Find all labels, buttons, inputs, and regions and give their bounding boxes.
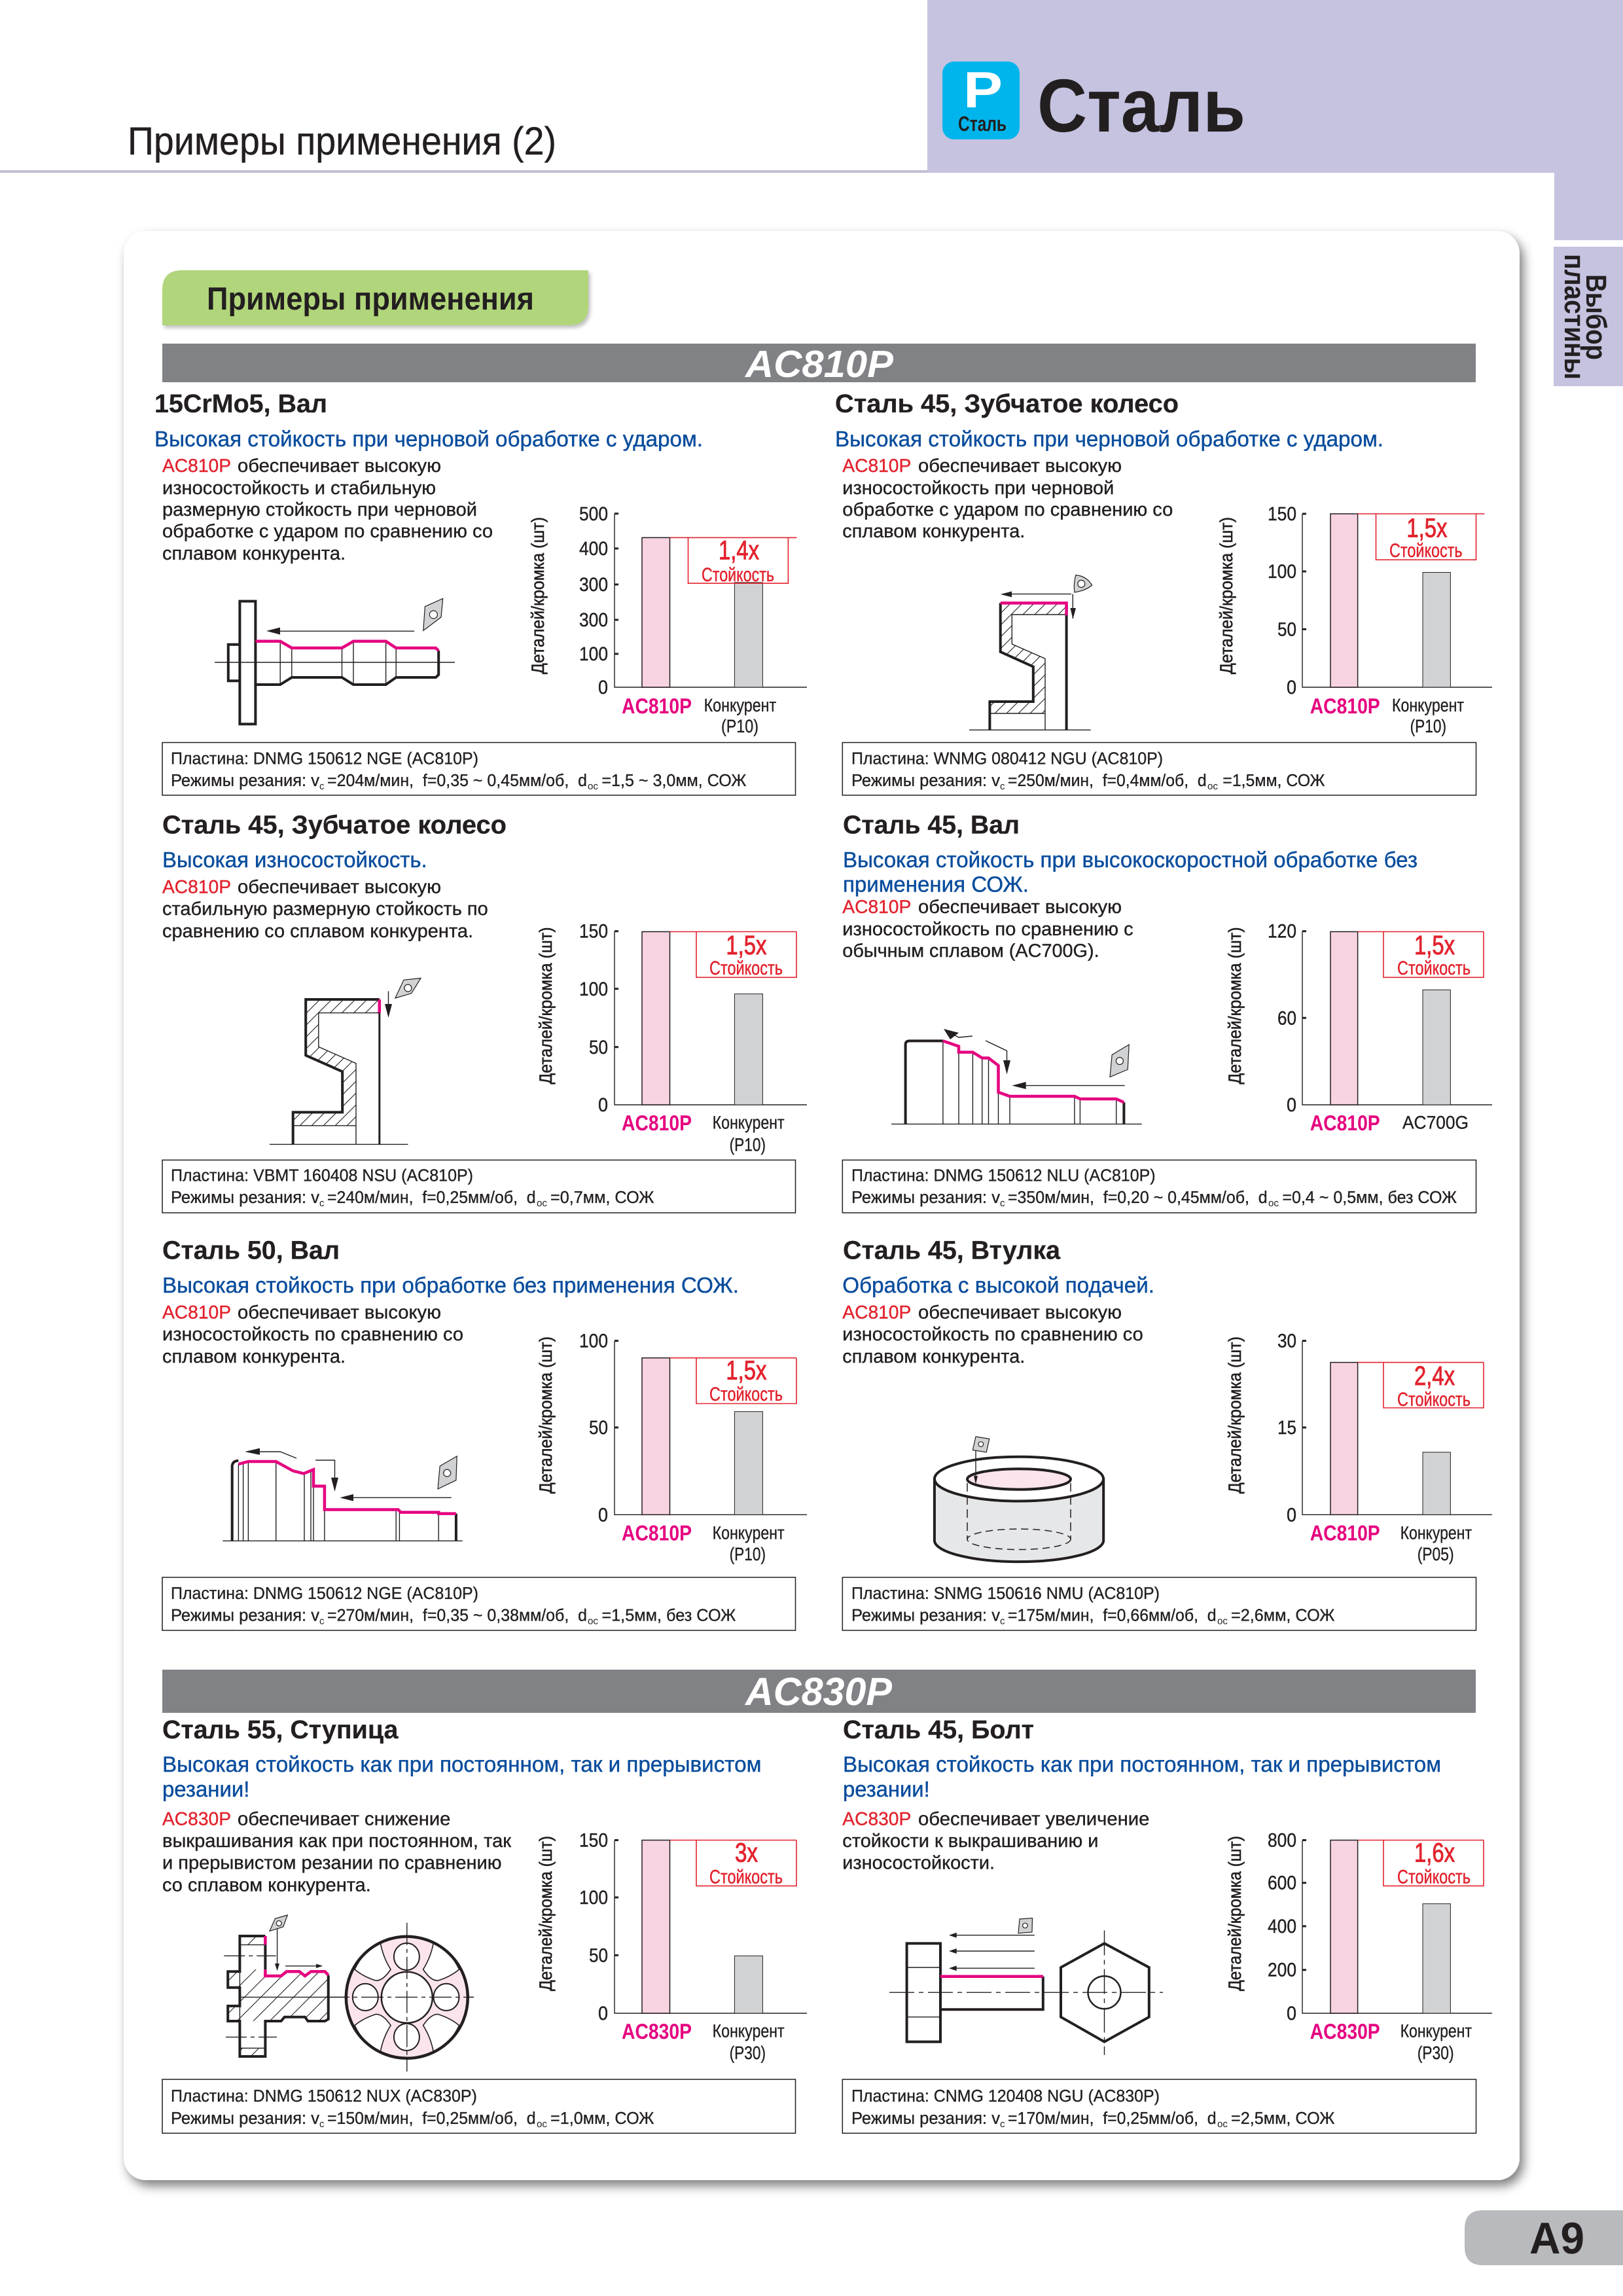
parameters box — [162, 1577, 796, 1630]
panel: main white card — [124, 231, 1520, 2180]
parameters box — [162, 1160, 796, 1213]
bar chart: 50 — [589, 1945, 608, 1966]
bar chart: AC810P — [1310, 1111, 1380, 1135]
bar chart: Деталей/кромка (шт) — [536, 927, 556, 1084]
body text: стабильную размерную стойкость по — [162, 899, 488, 920]
drawing: gear section — [270, 978, 421, 1144]
icon: P steel badge: Сталь — [958, 112, 1007, 135]
bar chart: 0 — [1287, 677, 1296, 698]
body text: AC810P — [842, 897, 911, 918]
category title: Сталь — [1037, 64, 1245, 148]
bar chart: 1,4x — [719, 535, 759, 565]
body text: обеспечивает снижение — [238, 1808, 450, 1829]
bar chart — [528, 503, 807, 736]
bar chart: Стойкость — [1389, 540, 1463, 562]
bar chart: 1,5x — [1414, 930, 1455, 960]
parameters box: Пластина: DNMG 150612 NGE (AC810P) — [171, 749, 478, 768]
header band — [0, 0, 1623, 240]
parameters box: Пластина: DNMG 150612 NUX (AC830P) — [171, 2086, 477, 2106]
bar chart — [536, 921, 807, 1155]
parameters box: c — [319, 1198, 325, 1209]
bar chart: 100 — [579, 643, 608, 665]
bar chart: 100 — [579, 978, 608, 1000]
parameters box: oc — [537, 2119, 548, 2130]
bar chart: (P05) — [1418, 1544, 1454, 1564]
side tab: Выбор — [1580, 274, 1612, 360]
bar chart: 800 — [1268, 1830, 1296, 1851]
body text: обеспечивает высокую — [238, 877, 441, 898]
parameters box: Режимы резания: v — [171, 1187, 319, 1207]
bar chart: 300 — [579, 609, 608, 631]
parameters box: Пластина: WNMG 080412 NGU (AC810P) — [851, 749, 1163, 768]
subtitle: применения СОЖ. — [843, 873, 1029, 897]
subtitle: Обработка с высокой подачей. — [842, 1274, 1154, 1298]
heading tab: examples — [162, 270, 588, 325]
body text: износостойкость и стабильную — [162, 478, 436, 499]
bar chart: 0 — [598, 1504, 608, 1526]
bar chart: 1,5x — [726, 1355, 767, 1385]
body text — [162, 877, 488, 942]
parameters box: =2,6мм, СОЖ — [1231, 1605, 1334, 1625]
bar chart: Стойкость — [702, 564, 774, 586]
parameters box: =2,5мм, СОЖ — [1231, 2108, 1334, 2128]
body text: износостойкости. — [842, 1853, 995, 1874]
bar chart: 150 — [579, 921, 608, 942]
bar chart: 0 — [1287, 1094, 1296, 1116]
bar chart: Конкурент — [713, 2020, 785, 2041]
title: Сталь 50, Вал — [162, 1236, 340, 1265]
bar chart: Конкурент — [1400, 2020, 1472, 2041]
section bar: AC830P — [162, 1670, 1476, 1713]
drawing: shaft — [215, 598, 455, 724]
body text: обеспечивает высокую — [918, 456, 1122, 476]
panel: case 5 steel 50 shaft — [162, 1236, 807, 1630]
panel: case 2 steel 45 gear — [835, 389, 1492, 795]
body text: износостойкость при черновой — [842, 478, 1114, 499]
body text: износостойкость по сравнению с — [842, 919, 1133, 940]
bar chart: AC810P — [622, 694, 692, 718]
parameters box: =270м/мин, f=0,35 ~ 0,38мм/об, d — [327, 1605, 587, 1625]
body text: обеспечивает высокую — [238, 1302, 441, 1323]
parameters box: =1,5мм, СОЖ — [1222, 770, 1325, 790]
panel: case 4 steel 45 shaft — [842, 811, 1492, 1213]
subtitle: Высокая стойкость при высокоскоростной обработке без — [843, 848, 1418, 872]
bar chart: 0 — [1287, 1504, 1296, 1526]
parameters box: Пластина: DNMG 150612 NGE (AC810P) — [171, 1583, 478, 1603]
body text — [842, 1302, 1143, 1367]
parameters box: Пластина: SNMG 150616 NMU (AC810P) — [851, 1583, 1160, 1603]
bar chart: 60 — [1277, 1007, 1296, 1029]
title: Сталь 45, Болт — [843, 1715, 1034, 1744]
subtitle: Высокая стойкость при обработке без применения СОЖ. — [162, 1274, 739, 1298]
bar chart: AC810P — [1310, 1521, 1380, 1545]
bar chart: Деталей/кромка (шт) — [1225, 1836, 1245, 1991]
body text: размерную стойкость при черновой — [162, 499, 477, 520]
parameters box: =350м/мин, f=0,20 ~ 0,45мм/об, d — [1008, 1187, 1268, 1207]
body text: AC810P — [842, 1302, 911, 1323]
parameters box: Режимы резания: v — [851, 1605, 1000, 1625]
body text: сравнению со сплавом конкурента. — [162, 921, 473, 942]
parameters box: oc — [1207, 781, 1219, 792]
title: Сталь 55, Ступица — [162, 1715, 399, 1744]
bar chart: Деталей/кромка (шт) — [1225, 1336, 1245, 1494]
parameters box: =1,0мм, СОЖ — [550, 2108, 654, 2128]
body text: обработке с ударом по сравнению со — [842, 499, 1173, 520]
bar chart: 15 — [1277, 1417, 1296, 1439]
section bar: AC810P — [162, 343, 1476, 386]
body text — [162, 1302, 463, 1367]
body text: обеспечивает высокую — [918, 897, 1122, 918]
subtitle — [843, 1753, 1441, 1802]
page heading: Примеры применения (2) — [128, 119, 556, 163]
bar chart — [536, 1331, 807, 1564]
body text — [162, 1808, 512, 1895]
bar chart — [1225, 1830, 1492, 2063]
icon: P steel badge: P — [963, 61, 1003, 118]
body text: износостойкость по сравнению со — [842, 1324, 1143, 1345]
bar chart: 0 — [1287, 2003, 1296, 2024]
page number tab — [1465, 2210, 1623, 2265]
icon: P steel badge — [942, 61, 1020, 139]
parameters box: c — [1000, 1198, 1005, 1209]
drawing: stepped shaft — [223, 1448, 463, 1541]
bar chart: Стойкость — [709, 1867, 783, 1888]
bar chart: 150 — [579, 1830, 608, 1851]
parameters box: oc — [1268, 1198, 1279, 1209]
bar chart: 100 — [1268, 561, 1296, 583]
title: Сталь 45, Зубчатое колесо — [835, 389, 1179, 418]
bar chart: Конкурент — [704, 695, 776, 715]
bar chart: AC830P — [1310, 2019, 1380, 2043]
bar chart: 1,6x — [1414, 1837, 1455, 1867]
bar chart: 100 — [579, 1887, 608, 1909]
subtitle: Высокая стойкость как при постоянном, так и прерывистом — [162, 1753, 761, 1777]
parameters box: =1,5 ~ 3,0мм, СОЖ — [601, 770, 746, 790]
bar chart: (P10) — [721, 716, 758, 736]
body text — [162, 456, 493, 564]
drawing: gear section — [969, 575, 1092, 730]
section bar: AC810P: AC810P — [744, 343, 893, 386]
parameters box: c — [319, 2119, 325, 2130]
panel: case 3 steel 45 gear — [162, 811, 807, 1213]
parameters box: oc — [1217, 1616, 1228, 1627]
drawing: bushing — [935, 1437, 1103, 1562]
bar chart: (P10) — [730, 1544, 766, 1564]
bar chart: Деталей/кромка (шт) — [536, 1836, 556, 1991]
bar chart: Деталей/кромка (шт) — [536, 1336, 556, 1494]
panel: case 1 15CrMo5 shaft — [154, 389, 807, 795]
parameters box: oc — [588, 781, 599, 792]
parameters box: Режимы резания: v — [851, 1187, 1000, 1207]
parameters box: c — [319, 1616, 325, 1627]
bar chart — [1225, 1331, 1492, 1564]
drawing: bolt — [889, 1918, 1163, 2055]
title: 15CrMo5, Вал — [154, 389, 327, 418]
bar chart: AC830P — [622, 2019, 692, 2043]
body text: сплавом конкурента. — [162, 1346, 346, 1367]
parameters box — [842, 1577, 1476, 1630]
body text: сплавом конкурента. — [842, 521, 1025, 542]
bar chart — [536, 1830, 807, 2063]
bar chart: 200 — [1268, 1960, 1296, 1981]
body text: со сплавом конкурента. — [162, 1874, 371, 1895]
parameters box: Режимы резания: v — [171, 1605, 319, 1625]
parameters box: oc — [1217, 2119, 1228, 2130]
bar chart: 100 — [579, 1331, 608, 1352]
bar chart: 400 — [1268, 1916, 1296, 1937]
subtitle: Высокая стойкость как при постоянном, так и прерывистом — [843, 1753, 1441, 1777]
bar chart: AC810P — [1310, 694, 1380, 718]
body text: AC810P — [842, 456, 911, 476]
section bar: AC830P: AC830P — [744, 1670, 893, 1713]
bar chart: 1,5x — [1406, 513, 1448, 543]
body text: сплавом конкурента. — [162, 543, 346, 564]
bar chart: Стойкость — [1397, 1389, 1471, 1410]
body text: обеспечивает увеличение — [918, 1808, 1149, 1829]
parameters box — [842, 1160, 1476, 1213]
bar chart: 50 — [589, 1417, 608, 1439]
bar chart: Деталей/кромка (шт) — [1217, 517, 1236, 674]
bar chart: (P30) — [1418, 2043, 1454, 2063]
bar chart: 50 — [1277, 619, 1296, 640]
parameters box: c — [1000, 1616, 1005, 1627]
bar chart: AC810P — [622, 1521, 692, 1545]
panel: case 8 steel 45 bolt — [842, 1715, 1492, 2133]
body text: AC810P — [162, 1302, 231, 1323]
parameters box: =150м/мин, f=0,25мм/об, d — [327, 2108, 536, 2128]
panel: case 7 steel 55 hub — [162, 1715, 807, 2133]
parameters box: =1,5мм, без СОЖ — [601, 1605, 736, 1625]
bar chart: Конкурент — [1400, 1522, 1472, 1543]
bar chart: AC700G — [1402, 1113, 1469, 1133]
body text: и прерывистом резании по сравнению — [162, 1853, 501, 1874]
bar chart: Деталей/кромка (шт) — [1225, 927, 1245, 1084]
parameters box — [162, 2079, 796, 2133]
parameters box: Режимы резания: v — [171, 770, 319, 790]
parameters box: Режимы резания: v — [851, 770, 1000, 790]
bar chart: 600 — [1268, 1873, 1296, 1894]
bar chart — [1217, 503, 1492, 736]
subtitle: резании! — [162, 1778, 249, 1802]
bar chart: (P10) — [730, 1135, 766, 1155]
body text: AC810P — [162, 456, 231, 476]
title: Сталь 45, Зубчатое колесо — [162, 811, 507, 840]
parameters box: c — [319, 781, 325, 792]
parameters box: =175м/мин, f=0,66мм/об, d — [1008, 1605, 1217, 1625]
body text: AC810P — [162, 877, 231, 898]
bar chart: 50 — [589, 1037, 608, 1058]
side tab: пластины — [1558, 254, 1590, 380]
body text: AC830P — [162, 1808, 231, 1829]
panel: case 6 steel 45 bushing — [842, 1236, 1492, 1630]
parameters box: oc — [588, 1616, 599, 1627]
bar chart: Стойкость — [709, 958, 783, 979]
body text: сплавом конкурента. — [842, 1346, 1025, 1367]
body text — [842, 897, 1133, 961]
bar chart: 0 — [598, 2003, 608, 2024]
parameters box: Режимы резания: v — [171, 2108, 319, 2128]
bar chart: AC810P — [622, 1111, 692, 1135]
parameters box: =250м/мин, f=0,4мм/об, d — [1008, 770, 1207, 790]
parameters box: =170м/мин, f=0,25мм/об, d — [1008, 2108, 1217, 2128]
bar chart: 150 — [1268, 503, 1296, 525]
bar chart: Конкурент — [1392, 695, 1464, 715]
parameters box: =0,4 ~ 0,5мм, без СОЖ — [1282, 1187, 1457, 1207]
bar chart: Стойкость — [1397, 1867, 1471, 1888]
side tab — [1554, 247, 1623, 386]
bar chart: 2,4x — [1414, 1361, 1455, 1391]
bar chart: (P10) — [1410, 716, 1446, 736]
bar chart: 500 — [579, 503, 608, 525]
drawing: hub section and front view — [224, 1915, 474, 2072]
body text — [842, 1808, 1149, 1874]
parameters box: Пластина: CNMG 120408 NGU (AC830P) — [851, 2086, 1160, 2106]
bar chart: 0 — [598, 677, 608, 698]
body text: обеспечивает высокую — [238, 456, 441, 476]
bar chart: 300 — [579, 574, 608, 596]
bar chart: Конкурент — [713, 1113, 785, 1133]
parameters box — [842, 742, 1476, 795]
bar chart: (P30) — [730, 2043, 766, 2063]
page number tab: A9 — [1529, 2214, 1584, 2263]
body text: обычным сплавом (AC700G). — [842, 941, 1099, 961]
subtitle: Высокая стойкость при черновой обработке с ударом. — [154, 427, 703, 452]
parameters box: =240м/мин, f=0,25мм/об, d — [327, 1187, 536, 1207]
parameters box: c — [1000, 2119, 1005, 2130]
bar chart: 0 — [598, 1094, 608, 1116]
body text: стойкости к выкрашиванию и — [842, 1831, 1098, 1852]
subtitle — [843, 848, 1418, 897]
bar chart: Конкурент — [713, 1522, 785, 1543]
parameters box: =204м/мин, f=0,35 ~ 0,45мм/об, d — [327, 770, 587, 790]
parameters box: Пластина: DNMG 150612 NLU (AC810P) — [851, 1166, 1156, 1185]
body text — [842, 456, 1173, 542]
body text: обеспечивает высокую — [918, 1302, 1122, 1323]
body text: износостойкость по сравнению со — [162, 1324, 463, 1345]
heading tab: examples: Примеры применения — [207, 281, 534, 317]
parameters box: =0,7мм, СОЖ — [550, 1187, 654, 1207]
parameters box: Пластина: VBMT 160408 NSU (AC810P) — [171, 1166, 473, 1185]
parameters box: c — [1000, 781, 1005, 792]
bar chart — [1225, 921, 1492, 1135]
body text: обработке с ударом по сравнению со — [162, 521, 493, 542]
body text: AC830P — [842, 1808, 911, 1829]
subtitle: Высокая стойкость при черновой обработке с ударом. — [835, 427, 1383, 452]
subtitle: резании! — [843, 1778, 930, 1802]
subtitle: Высокая износостойкость. — [162, 848, 427, 872]
parameters box — [842, 2079, 1476, 2133]
bar chart: Деталей/кромка (шт) — [528, 517, 548, 674]
bar chart: 120 — [1268, 921, 1296, 942]
bar chart: 30 — [1277, 1331, 1296, 1352]
parameters box — [162, 742, 796, 795]
bar chart: 1,5x — [726, 930, 767, 960]
parameters box: oc — [537, 1198, 548, 1209]
bar chart: Стойкость — [1397, 958, 1471, 979]
bar chart: 400 — [579, 538, 608, 560]
body text: выкрашивания как при постоянном, так — [162, 1831, 512, 1852]
subtitle — [162, 1753, 761, 1802]
parameters box: Режимы резания: v — [851, 2108, 1000, 2128]
title: Сталь 45, Втулка — [843, 1236, 1061, 1265]
bar chart: Стойкость — [709, 1384, 783, 1405]
bar chart: 3x — [735, 1837, 758, 1867]
title: Сталь 45, Вал — [843, 811, 1020, 840]
drawing: stepped shaft — [891, 1029, 1142, 1124]
